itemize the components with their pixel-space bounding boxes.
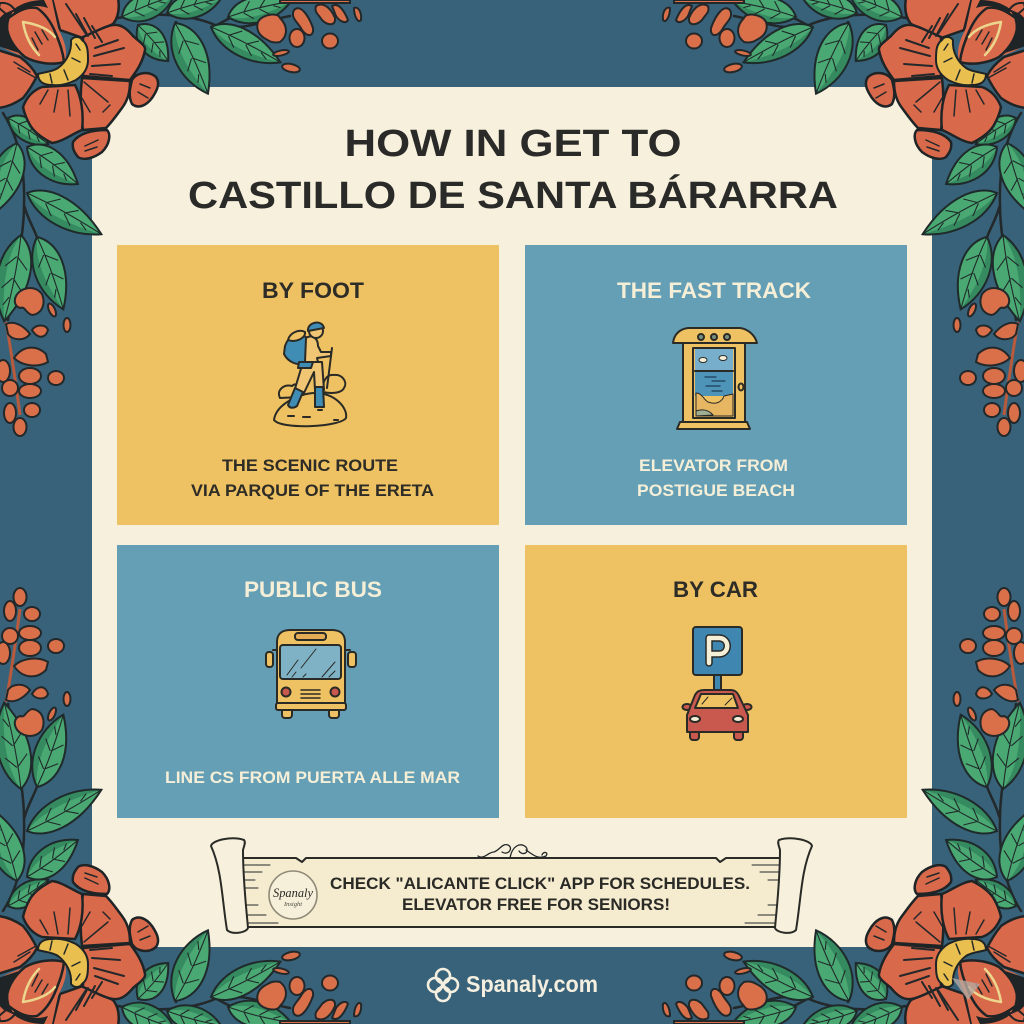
banner text bbox=[330, 874, 750, 914]
icon: knot bbox=[428, 969, 458, 1001]
cursor mark bbox=[952, 978, 980, 1000]
floral corner: top left bbox=[0, 0, 361, 436]
text: elevator: ELEVATOR FROM bbox=[639, 456, 788, 475]
banner scroll bbox=[211, 838, 812, 933]
text: bus line: LINE CS FROM PUERTA ALLE MAR bbox=[165, 768, 460, 787]
panel: the fast track bbox=[525, 245, 907, 525]
scroll end: right bbox=[775, 838, 812, 933]
heading: public bus: PUBLIC BUS bbox=[244, 577, 382, 602]
heading: by foot: BY FOOT bbox=[262, 278, 365, 303]
banner text: CHECK "ALICANTE CLICK" APP FOR SCHEDULES. bbox=[330, 874, 750, 893]
cream panel bbox=[92, 87, 932, 947]
text: elevator bbox=[637, 456, 795, 500]
text: scenic route: THE SCENIC ROUTE bbox=[222, 456, 398, 475]
panel: by foot bbox=[117, 245, 499, 525]
title bbox=[188, 123, 838, 217]
panel: public bus bbox=[117, 545, 499, 818]
seal: Insight bbox=[283, 901, 302, 908]
text: scenic route bbox=[191, 456, 434, 500]
site name: Spanaly.com bbox=[466, 971, 598, 997]
title: HOW IN GET TO bbox=[344, 123, 682, 165]
heading: the fast track: THE FAST TRACK bbox=[617, 278, 811, 303]
seal: Spanaly bbox=[273, 885, 313, 900]
panel: by car bbox=[525, 545, 907, 818]
flourish bbox=[478, 845, 547, 858]
icon: elevator bbox=[673, 328, 757, 429]
seal bbox=[269, 871, 317, 919]
floral corner: top right bbox=[663, 0, 1024, 436]
title: CASTILLO DE SANTA BÁRARRA bbox=[188, 173, 838, 217]
icon: hiker bbox=[274, 323, 346, 426]
banner text: ELEVATOR FREE FOR SENIORS! bbox=[402, 895, 670, 914]
text: scenic route: VIA PARQUE OF THE ERETA bbox=[191, 481, 434, 500]
footer logo bbox=[428, 969, 598, 1001]
icon: bus bbox=[266, 630, 356, 718]
floral corner: bottom right bbox=[663, 588, 1024, 1024]
scroll end: left bbox=[211, 838, 248, 933]
icon: parking sign and car bbox=[682, 627, 752, 740]
heading: by car: BY CAR bbox=[673, 577, 758, 602]
text: elevator: POSTIGUE BEACH bbox=[637, 481, 795, 500]
floral corner: bottom left bbox=[0, 588, 361, 1024]
